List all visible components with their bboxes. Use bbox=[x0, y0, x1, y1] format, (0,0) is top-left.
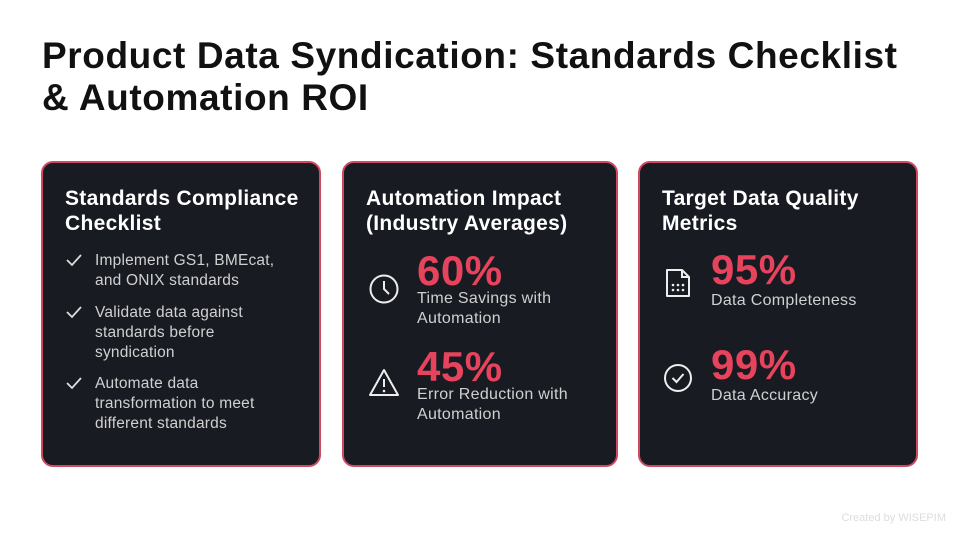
panel: automation impact bbox=[342, 161, 618, 467]
stat 95%: 95% bbox=[711, 246, 797, 293]
label: Time Savings with bbox=[417, 290, 551, 307]
stat 99%: 99% bbox=[711, 341, 797, 388]
heading: Automation Impact bbox=[366, 187, 561, 210]
checklist item 2: Validate data against bbox=[95, 304, 243, 321]
checklist item 2: standards before bbox=[95, 324, 215, 341]
heading bbox=[662, 187, 859, 235]
checklist item 3 bbox=[66, 375, 254, 432]
panel: data quality bbox=[638, 161, 918, 467]
checklist item 3: Automate data bbox=[95, 375, 198, 392]
icon: document bbox=[666, 269, 690, 297]
icon: warning bbox=[369, 369, 399, 396]
label: Automation bbox=[417, 406, 501, 423]
label bbox=[417, 386, 568, 423]
heading bbox=[65, 187, 299, 235]
checklist item 2: syndication bbox=[95, 344, 175, 361]
icon: clock bbox=[370, 274, 398, 304]
icon: check circle bbox=[664, 364, 692, 392]
stat 60%: 60% bbox=[417, 247, 503, 294]
label: Data Accuracy bbox=[711, 387, 818, 404]
stat 45%: 45% bbox=[417, 343, 503, 390]
heading: (Industry Averages) bbox=[366, 212, 567, 235]
footer credit: Created by WISEPIM bbox=[841, 512, 946, 524]
heading bbox=[366, 187, 567, 235]
title: & Automation ROI bbox=[42, 77, 369, 118]
checklist item 3: different standards bbox=[95, 415, 227, 432]
checklist item 1: Implement GS1, BMEcat, bbox=[95, 252, 274, 269]
heading: Standards Compliance bbox=[65, 187, 299, 210]
title: Product Data Syndication: Standards Checklist bbox=[42, 35, 898, 76]
checklist item 1 bbox=[66, 252, 274, 289]
panel: standards compliance bbox=[41, 161, 321, 467]
heading: Checklist bbox=[65, 212, 161, 235]
label: Data Completeness bbox=[711, 292, 857, 309]
checklist item 2 bbox=[66, 304, 243, 361]
label: Error Reduction with bbox=[417, 386, 568, 403]
label: Automation bbox=[417, 310, 501, 327]
checklist item 3: transformation to meet bbox=[95, 395, 254, 412]
heading: Target Data Quality bbox=[662, 187, 859, 210]
label bbox=[417, 290, 551, 327]
title bbox=[42, 35, 898, 118]
heading: Metrics bbox=[662, 212, 738, 235]
checklist item 1: and ONIX standards bbox=[95, 272, 239, 289]
